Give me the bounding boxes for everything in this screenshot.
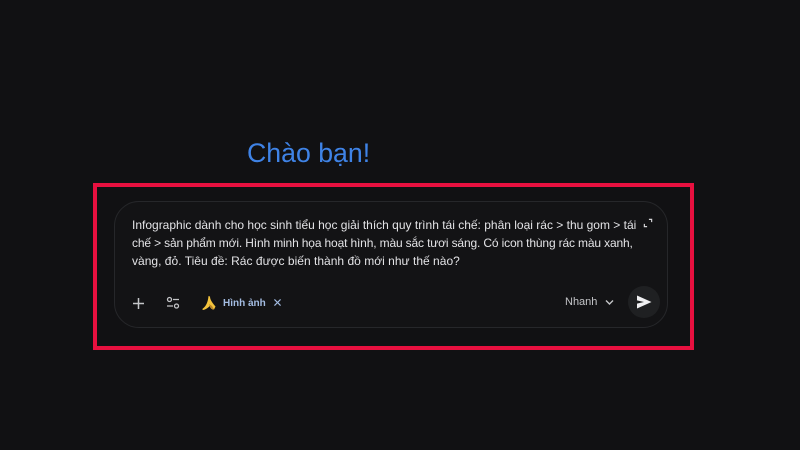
icon: chevron (606, 300, 614, 305)
icon: close (274, 299, 281, 306)
icon: banana (202, 296, 216, 310)
prompt text: Infographic dành cho học sinh tiểu học giải thích quy trình tái chế: phân loại rác > thu gom > tái (132, 218, 636, 232)
prompt text: vàng, đỏ. Tiêu đề: Rác được biến thành đồ mới như thế nào? (132, 254, 460, 268)
icon: tools sliders (166, 296, 180, 309)
icon: expand (644, 218, 652, 228)
icon: plus (133, 298, 144, 309)
label: model speed: Nhanh (565, 296, 597, 308)
panel: prompt input box (114, 201, 668, 328)
prompt text (132, 218, 636, 268)
label: image tool: Hình ảnh (223, 298, 266, 309)
button: send (628, 286, 660, 318)
prompt text: chế > sản phẩm mới. Hình minh họa hoạt hình, màu sắc tươi sáng. Có icon thùng rác màu xanh, (132, 236, 633, 250)
red highlight frame (93, 183, 694, 350)
heading: greeting: Chào bạn! (247, 138, 370, 168)
